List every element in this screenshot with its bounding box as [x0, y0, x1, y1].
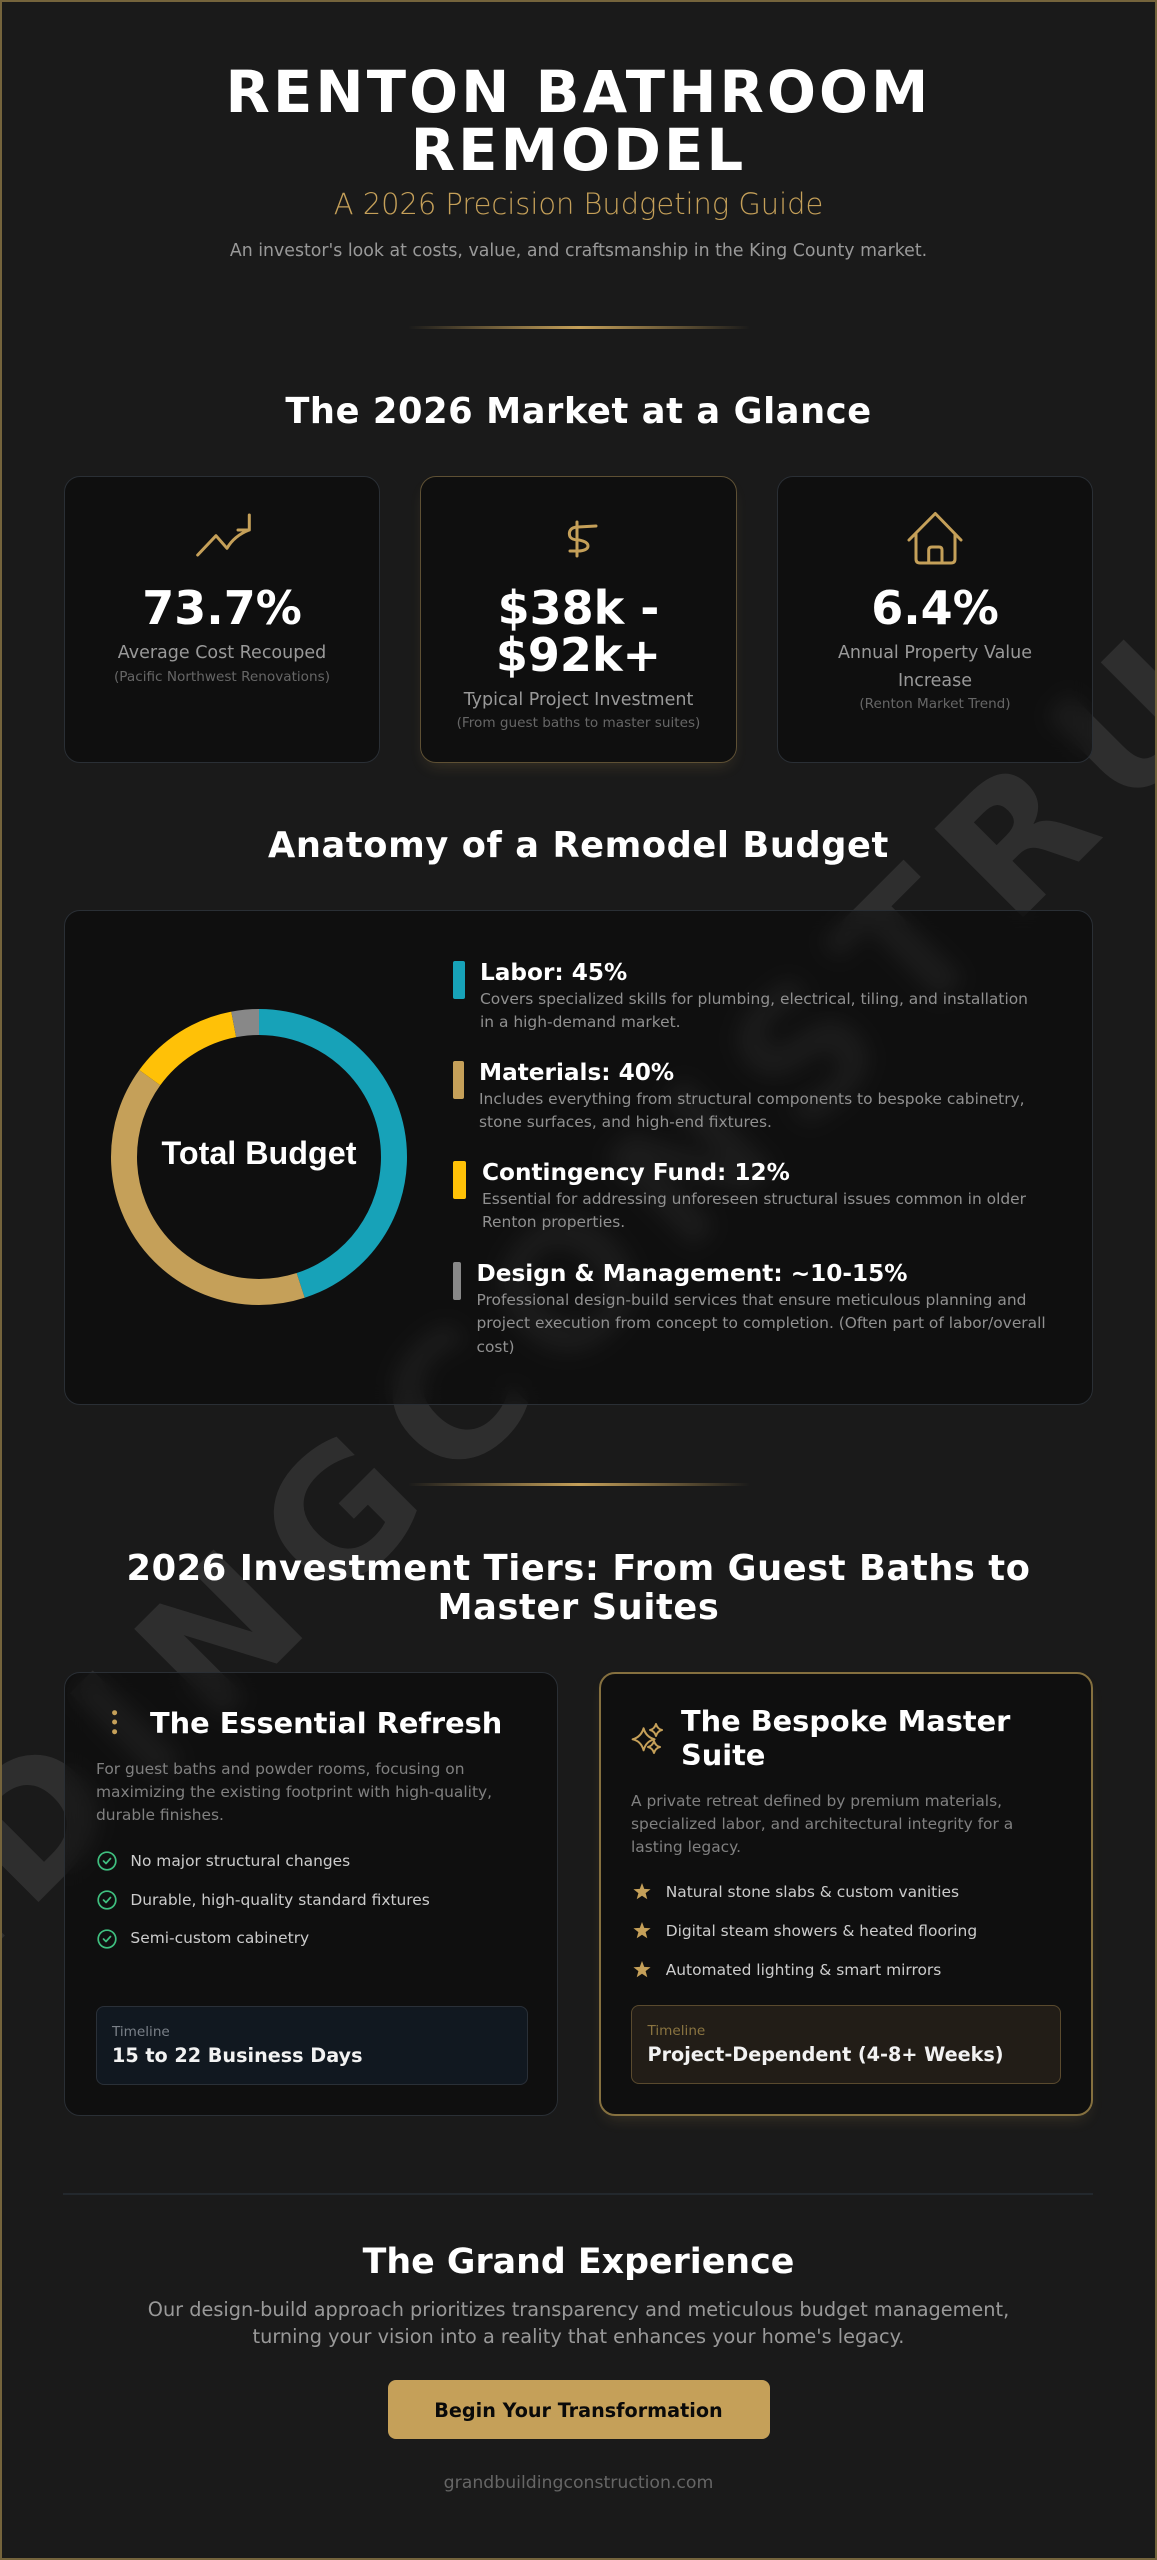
panel: budget breakdown [64, 910, 1093, 1405]
feature: automated lighting: Automated lighting & smart mirrors [666, 1961, 941, 1979]
tier title: The Bespoke Master [681, 1704, 1010, 1738]
call to action button: Begin Your Transformation [434, 2398, 723, 2422]
stat value [496, 581, 661, 682]
tier description: A private retreat defined by premium materials, [631, 1792, 1002, 1810]
feature: steam showers: Digital steam showers & heated flooring [666, 1922, 977, 1940]
timeline box: Timeline [112, 2024, 170, 2040]
title [226, 59, 931, 184]
heading: investment tiers [127, 1548, 1030, 1628]
stat source: (From guest baths to master suites) [457, 715, 700, 731]
icon: sparkles [632, 1723, 663, 1754]
legend: design and management: Professional design-build services that ensure meticulous planning and [476, 1291, 1026, 1309]
feature: cabinetry: Semi-custom cabinetry [130, 1929, 309, 1947]
stat value: $92k+ [496, 628, 661, 682]
feature: natural stone: Natural stone slabs & custom vanities [666, 1883, 959, 1901]
tagline: An investor's look at costs, value, and craftsmanship in the King County market. [230, 241, 927, 261]
tier description: For guest baths and powder rooms, focusing on [96, 1760, 465, 1778]
panel: bespoke master suite tier [598, 1672, 1093, 2116]
legend: labor: Labor: 45% [480, 959, 627, 986]
legend: labor [453, 959, 1028, 1031]
website url: grandbuildingconstruction.com [444, 2473, 713, 2493]
legend: labor: in a high-demand market. [480, 1013, 681, 1031]
legend: labor: Covers specialized skills for plumbing, electrical, tiling, and installation [480, 990, 1028, 1008]
icon: trending up [196, 514, 251, 557]
tier description: maximizing the existing footprint with high-quality, [96, 1783, 492, 1801]
stat label: Typical Project Investment [464, 690, 693, 710]
closing paragraph [148, 2298, 1009, 2348]
tier description: durable finishes. [96, 1806, 224, 1824]
stat label: Average Cost Recouped [118, 643, 326, 663]
tier description: lasting legacy. [631, 1838, 741, 1856]
donut chart: Total Budget [162, 1135, 357, 1171]
heading: investment tiers: Master Suites [438, 1587, 719, 1628]
icon: vertical dots [112, 1710, 118, 1734]
legend: materials: stone surfaces, and high-end fixtures. [479, 1113, 772, 1131]
closing paragraph: turning your vision into a reality that enhances your home's legacy. [253, 2325, 904, 2348]
timeline box [631, 2005, 1061, 2084]
stat value: 6.4% [871, 581, 999, 635]
legend: design and management [453, 1260, 1046, 1356]
legend: materials: Materials: 40% [479, 1059, 674, 1086]
legend: design and management: project execution from concept to completion. (Often part of labor/overall [476, 1314, 1046, 1332]
stat label [838, 643, 1032, 691]
heading: grand experience: The Grand Experience [363, 2242, 794, 2282]
stat source: (Pacific Northwest Renovations) [114, 668, 330, 684]
tier title [681, 1704, 1010, 1772]
timeline box [96, 2006, 528, 2085]
title: REMODEL [411, 117, 746, 184]
legend: contingency: Contingency Fund: 12% [482, 1159, 790, 1186]
subtitle: A 2026 Precision Budgeting Guide [334, 187, 823, 221]
legend: design and management: cost) [476, 1338, 515, 1356]
tier title: Suite [681, 1738, 765, 1772]
panel: essential refresh tier [64, 1672, 558, 2116]
stat value: $38k - [498, 581, 659, 635]
tier description: specialized labor, and architectural integrity for a [631, 1815, 1013, 1833]
legend: contingency: Renton properties. [482, 1213, 625, 1231]
tier description [631, 1792, 1013, 1856]
timeline box: 15 to 22 Business Days [112, 2044, 362, 2066]
icon: dollar sign [568, 520, 598, 558]
stat label: Annual Property Value [838, 643, 1032, 663]
timeline box: Project-Dependent (4-8+ Weeks) [648, 2042, 1004, 2066]
title: RENTON BATHROOM [226, 59, 931, 126]
closing paragraph: Our design-build approach prioritizes transparency and meticulous budget management, [148, 2298, 1009, 2321]
stat source: (Renton Market Trend) [859, 696, 1011, 712]
panel: stat card property value [777, 476, 1093, 763]
panel: stat card cost recouped [64, 476, 380, 763]
heading: anatomy of a budget: Anatomy of a Remodel Budget [268, 824, 889, 866]
legend: materials [453, 1059, 1025, 1131]
tier description [96, 1760, 492, 1824]
legend: contingency: Essential for addressing unforeseen structural issues common in older [482, 1190, 1026, 1208]
icon: house [907, 512, 963, 564]
heading: investment tiers: 2026 Investment Tiers: From Guest Baths to [127, 1548, 1030, 1589]
legend: design and management: Design & Management: ~10-15% [476, 1260, 908, 1287]
panel: stat card project investment [420, 476, 737, 763]
timeline box: Timeline [648, 2023, 705, 2039]
tier title: The Essential Refresh [150, 1706, 502, 1740]
feature: no structural changes: No major structural changes [130, 1852, 350, 1870]
stat label: Increase [898, 671, 972, 691]
feature: standard fixtures: Durable, high-quality standard fixtures [130, 1891, 430, 1909]
donut chart [111, 1009, 407, 1305]
heading: market at a glance: The 2026 Market at a Glance [285, 391, 872, 432]
call to action button [388, 2380, 770, 2439]
stat value: 73.7% [142, 581, 302, 635]
legend: materials: Includes everything from structural components to bespoke cabinetry, [479, 1090, 1025, 1108]
legend: contingency [453, 1159, 1026, 1231]
